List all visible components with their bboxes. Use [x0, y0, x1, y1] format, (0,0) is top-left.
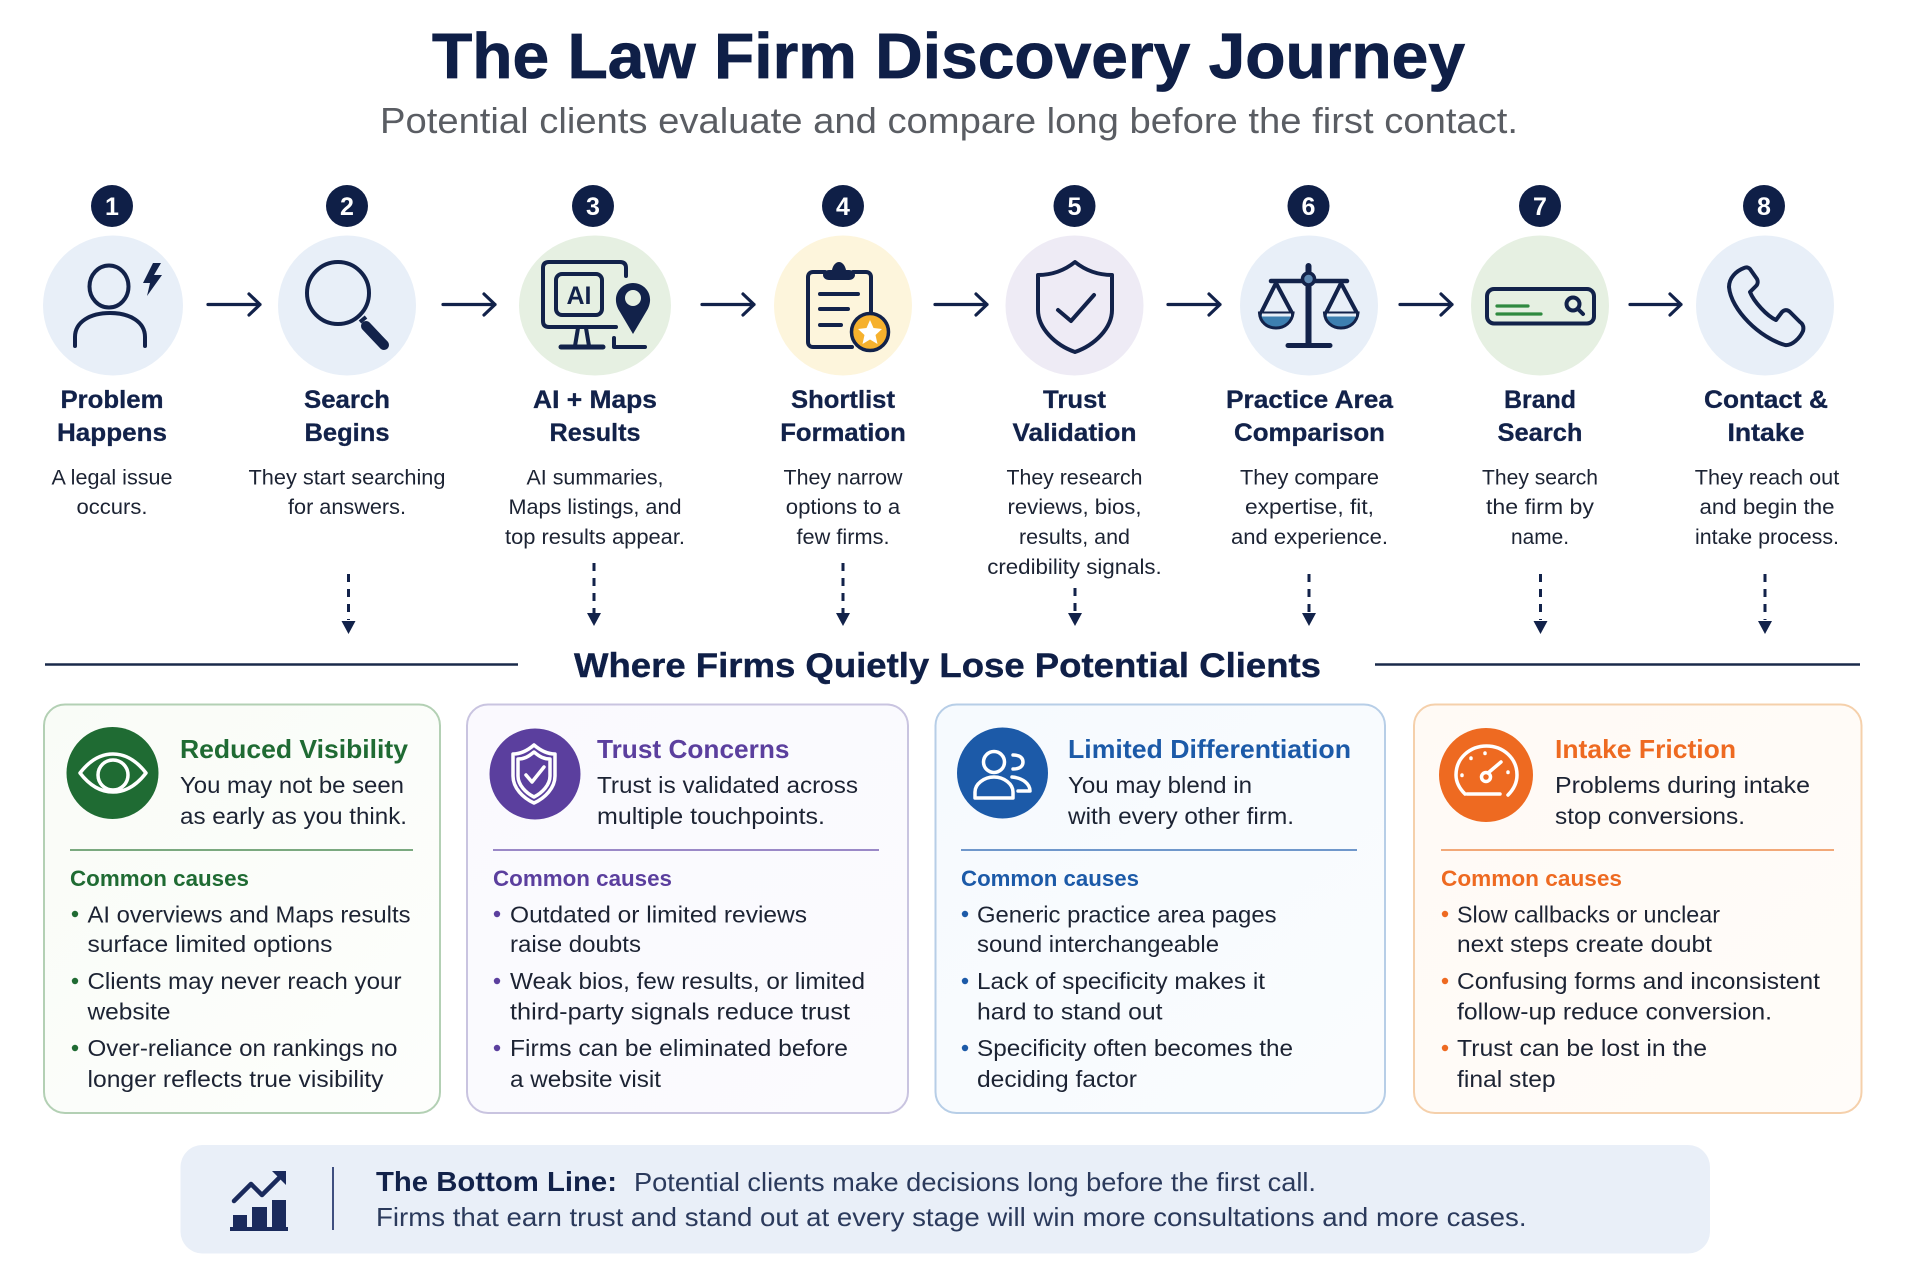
panel: trust concerns: [467, 704, 908, 1113]
section heading: Where Firms Quietly Lose Potential Clients: [574, 647, 1321, 685]
step description: [52, 466, 172, 519]
step description: few firms.: [796, 526, 890, 549]
step title: [1226, 386, 1394, 447]
causes list: Confusing forms and inconsistent: [1457, 968, 1821, 994]
causes list: [72, 902, 411, 1092]
causes list: deciding factor: [977, 1066, 1137, 1092]
step title: Begins: [304, 419, 390, 447]
icon: balance scales: [1240, 236, 1378, 376]
causes list: Lack of specificity makes it: [977, 968, 1266, 994]
number badge 5: 5: [1068, 193, 1082, 221]
step description: and experience.: [1231, 526, 1388, 549]
step title: [1012, 386, 1136, 447]
number badge 3: 3: [586, 193, 600, 221]
causes list: next steps create doubt: [1457, 931, 1713, 957]
step description: They narrow: [784, 466, 903, 490]
causes list: surface limited options: [88, 931, 332, 957]
step title: Search: [304, 386, 390, 414]
causes list: third-party signals reduce trust: [510, 998, 851, 1024]
step title: Intake: [1728, 419, 1805, 447]
step 8: contact and intake: [1695, 185, 1839, 549]
step description: They compare: [1240, 466, 1379, 490]
icon: gauge: [1439, 728, 1533, 822]
common causes label: Common causes: [1441, 866, 1622, 891]
step title: Contact &: [1704, 386, 1828, 414]
card summary: multiple touchpoints.: [597, 803, 825, 829]
icon: search bar: [1471, 236, 1609, 376]
step 2: search begins: [248, 185, 446, 519]
step description: [987, 466, 1162, 579]
icon: person with lightning bolt: [43, 236, 183, 376]
arrow 3 to 4: [702, 294, 754, 315]
step title: Brand: [1504, 386, 1576, 414]
step title: AI + Maps: [533, 386, 657, 414]
causes list: Over-reliance on rankings no: [88, 1035, 398, 1061]
causes list: Weak bios, few results, or limited: [510, 968, 865, 994]
step 5: trust validation: [987, 185, 1162, 579]
number badge 2: 2: [340, 193, 354, 221]
step title: Comparison: [1234, 419, 1385, 447]
step 4: shortlist formation: [774, 185, 912, 549]
icon: magnifying glass: [278, 236, 416, 376]
icon: shield: [490, 728, 580, 820]
step 7: brand search: [1471, 185, 1609, 549]
card summary: You may not be seen: [180, 772, 404, 798]
number badge 1: 1: [105, 193, 119, 221]
number badge 6: 6: [1302, 193, 1315, 221]
step description: [248, 466, 446, 519]
step title: [57, 386, 167, 447]
dashed down arrow under step 3: [587, 563, 601, 626]
icon: monitor with AI and map pin: AI: [566, 282, 592, 310]
common causes label: Common causes: [961, 866, 1139, 891]
card summary: [1555, 772, 1810, 829]
step description: credibility signals.: [987, 556, 1162, 579]
step description: for answers.: [288, 496, 406, 519]
step title: Results: [550, 419, 640, 447]
step title: [780, 386, 906, 447]
callout: the bottom line: [180, 1145, 1710, 1254]
arrow 5 to 6: [1168, 294, 1220, 315]
step title: Search: [1498, 419, 1582, 447]
step 3: AI and maps results: [505, 185, 685, 549]
step description: top results appear.: [505, 526, 685, 549]
step 1: problem happens: [43, 185, 183, 519]
icon: telephone handset: [1696, 236, 1834, 376]
arrow 4 to 5: [935, 294, 987, 315]
card heading: Limited Differentiation: [1068, 734, 1351, 764]
causes list: Slow callbacks or unclear: [1457, 902, 1720, 928]
number badge 4: [822, 185, 864, 227]
causes list: a website visit: [510, 1066, 662, 1092]
bottom line text: Potential clients make decisions long before the first call.: [634, 1167, 1316, 1197]
step title: Trust: [1043, 386, 1107, 414]
card summary: Trust is validated across: [597, 772, 858, 798]
icon: people: [957, 728, 1048, 818]
step title: Shortlist: [791, 386, 896, 414]
title: The Law Firm Discovery Journey: [432, 20, 1465, 92]
step description: intake process.: [1695, 526, 1839, 549]
arrow 6 to 7: [1400, 294, 1452, 315]
causes list: Generic practice area pages: [977, 902, 1276, 928]
dashed down arrow under step 4: [836, 563, 850, 626]
common causes label: Common causes: [493, 866, 672, 891]
number badge 8: 8: [1757, 193, 1771, 221]
number badge 4: 4: [836, 193, 850, 221]
number badge 1: [91, 185, 133, 227]
step title: Happens: [57, 419, 167, 447]
dashed down arrow under step 8: [1758, 574, 1772, 634]
number badge 5: [1054, 185, 1096, 227]
step description: [1231, 466, 1388, 549]
step description: name.: [1511, 526, 1569, 549]
step description: results, and: [1019, 526, 1130, 549]
step title: [533, 386, 657, 447]
step description: [1482, 466, 1598, 549]
step title: Formation: [780, 419, 906, 447]
step description: They start searching: [248, 466, 446, 490]
card summary: [597, 772, 858, 829]
icon: clipboard with star: [774, 236, 912, 376]
number badge 3: [572, 185, 614, 227]
number badge 7: [1519, 185, 1561, 227]
step description: They reach out: [1695, 466, 1839, 490]
causes list: final step: [1457, 1066, 1556, 1092]
step description: They search: [1482, 466, 1598, 490]
step title: Practice Area: [1226, 386, 1394, 414]
arrow 1 to 2: [208, 294, 260, 315]
causes list: raise doubts: [510, 931, 641, 957]
step description: [784, 466, 903, 549]
card heading: Trust Concerns: [597, 734, 790, 764]
icon: eye: [66, 727, 158, 819]
step description: options to a: [786, 496, 901, 519]
causes list: hard to stand out: [977, 998, 1163, 1024]
card summary: with every other firm.: [1067, 803, 1294, 829]
causes list: Specificity often becomes the: [977, 1035, 1293, 1061]
card summary: Problems during intake: [1555, 772, 1810, 798]
causes list: Clients may never reach your: [88, 968, 402, 994]
card heading: Intake Friction: [1555, 734, 1736, 764]
subtitle: Potential clients evaluate and compare long before the first contact.: [380, 100, 1518, 141]
step description: and begin the: [1700, 496, 1834, 519]
common causes label: Common causes: [70, 866, 249, 891]
causes list: follow-up reduce conversion.: [1457, 998, 1772, 1024]
number badge 2: [326, 185, 368, 227]
causes list: AI overviews and Maps results: [88, 902, 410, 928]
causes list: longer reflects true visibility: [88, 1066, 384, 1092]
icon: shield with check: [1006, 236, 1144, 376]
card summary: You may blend in: [1068, 772, 1252, 798]
icon: growth chart: [230, 1171, 288, 1231]
causes list: website: [86, 998, 170, 1024]
bottom line text: Firms that earn trust and stand out at every stage will win more consultations and more cases.: [376, 1202, 1526, 1232]
bottom line text: [376, 1166, 1526, 1232]
panel: limited differentiation: [936, 704, 1385, 1113]
arrow 7 to 8: [1630, 294, 1681, 315]
step description: occurs.: [76, 496, 148, 519]
step title: Problem: [60, 386, 164, 414]
causes list: Firms can be eliminated before: [510, 1035, 848, 1061]
card summary: [180, 772, 407, 829]
step 6: practice area comparison: [1226, 185, 1394, 549]
step description: the firm by: [1486, 496, 1595, 519]
dashed down arrow under step 2: [342, 574, 356, 634]
icon: monitor with AI and map pin: [519, 236, 671, 376]
causes list: [1442, 902, 1821, 1092]
number badge 6: [1288, 185, 1330, 227]
panel: intake friction: [1414, 704, 1862, 1113]
step title: [304, 386, 390, 447]
step description: Maps listings, and: [508, 496, 682, 519]
causes list: sound interchangeable: [977, 931, 1219, 957]
dashed down arrow under step 6: [1302, 574, 1316, 626]
step description: expertise, fit,: [1245, 496, 1374, 519]
dashed down arrow under step 7: [1534, 574, 1548, 634]
arrow 2 to 3: [443, 294, 495, 315]
bottom line text: The Bottom Line:: [376, 1166, 617, 1197]
step title: Validation: [1012, 419, 1136, 447]
step title: [1704, 386, 1828, 447]
step description: They research: [1006, 466, 1142, 490]
step description: [1695, 466, 1839, 549]
number badge 8: [1743, 185, 1785, 227]
causes list: [962, 902, 1293, 1092]
panel: reduced visibility: [44, 704, 440, 1113]
card heading: Reduced Visibility: [180, 734, 409, 764]
card summary: as early as you think.: [180, 803, 407, 829]
card summary: [1067, 772, 1294, 829]
number badge 7: 7: [1533, 193, 1547, 221]
causes list: Trust can be lost in the: [1457, 1035, 1707, 1061]
card summary: stop conversions.: [1555, 803, 1745, 829]
step description: reviews, bios,: [1008, 496, 1142, 519]
dashed down arrow under step 5: [1068, 588, 1082, 626]
step description: AI summaries,: [526, 466, 664, 490]
causes list: Outdated or limited reviews: [510, 902, 807, 928]
step description: A legal issue: [52, 466, 172, 490]
causes list: [494, 902, 865, 1092]
step title: [1498, 386, 1582, 447]
step description: [505, 466, 685, 549]
